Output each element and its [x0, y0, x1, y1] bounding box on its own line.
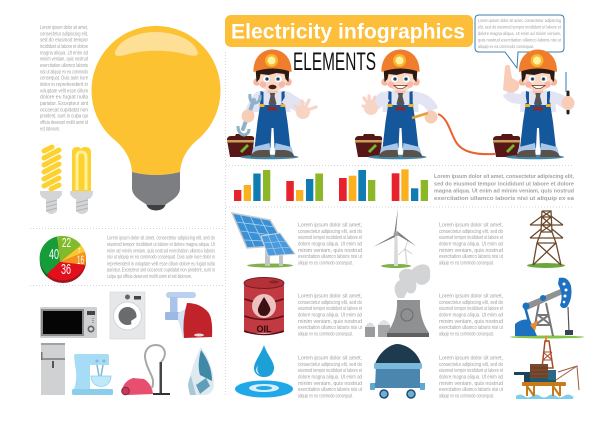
text block: water: aliquip ex ea commodo consequat.	[298, 394, 353, 400]
text block: solar: consectetur adipiscing elit, sed do	[298, 229, 362, 235]
icon: microwave	[40, 307, 97, 338]
text block: solar: Lorem ipsum dolor sit amet,	[298, 222, 362, 228]
icon: offshore oil rig	[514, 336, 579, 399]
icon: oil pumpjack	[510, 278, 584, 338]
text block: top left	[40, 25, 88, 132]
text block: top left: magna aliqua. Ut enim ad	[40, 50, 88, 56]
text block: water: minim veniam, quis nostrud	[298, 381, 362, 387]
icon: U-tube CFL bulb	[70, 147, 93, 214]
text block: wind	[439, 222, 504, 266]
text block: bar chart caption: magna aliqua. Ut enim ad minim veniam, quis nostrud	[434, 189, 574, 195]
text block: top left: dolore eu fugiat nulla	[40, 95, 88, 101]
text block: pie chart caption: eiusmod tempor incididunt ut labore et dolore magna aliqua. Ut	[107, 242, 215, 248]
text block: wind: dolore magna aliqua. Ut enim ad	[439, 242, 503, 248]
icon: vacuum cleaner	[122, 345, 170, 395]
text block: pie chart caption: culpa qui officia deserunt mollit anim id est laborum.	[107, 274, 192, 280]
text block: coal: dolore magna aliqua. Ut enim ad	[439, 374, 503, 380]
text block: top left: pariatur. Excepteur sint	[40, 101, 88, 107]
text block: coal: Lorem ipsum dolor sit amet,	[439, 356, 504, 362]
subtitle: ELEMENTS	[293, 48, 376, 76]
icon: coal cart	[370, 344, 425, 398]
dividers	[30, 52, 572, 397]
icon: nuclear plant	[365, 264, 430, 337]
text block: nuclear	[439, 294, 504, 338]
text block: wind: consectetur adipiscing elit, sed do	[439, 229, 503, 235]
icon: solar panels	[232, 213, 295, 268]
icon: power pylon	[527, 211, 565, 268]
pie chart	[40, 236, 86, 283]
text block: oil: eiusmod tempor incididunt ut labore et	[298, 306, 362, 312]
pie chart: 16	[77, 253, 84, 267]
text block: coal: aliquip ex ea commodo consequat.	[439, 394, 494, 400]
title banner	[225, 15, 473, 47]
pie chart: 40	[49, 246, 59, 263]
icon: refrigerator	[41, 343, 65, 395]
text block: nuclear: exercitation ullamco laboris nisi ut	[439, 325, 503, 331]
speech bubble: aliquip ex ea commodo consequat.	[478, 44, 534, 50]
text block: top left: consectetur adipiscing elit,	[40, 31, 88, 37]
text block: nuclear: Lorem ipsum dolor sit amet,	[439, 294, 504, 300]
text block: pie chart caption: enim ad minim veniam, quis nostrud exercitation ullamco laboris	[107, 248, 215, 254]
worker with screwdriver	[493, 50, 574, 159]
icon: wind turbines	[373, 208, 416, 268]
text block: top left: exercitation ullamco laboris	[40, 63, 88, 69]
text block: nuclear: eiusmod tempor incididunt ut labore et	[439, 306, 503, 312]
text block: solar: exercitation ullamco laboris nisi ut	[298, 254, 362, 260]
text block: top left: dolor in reprehenderit in	[40, 82, 88, 88]
text block: oil: dolore magna aliqua. Ut enim ad	[298, 312, 362, 318]
text block: coal: consectetur adipiscing elit, sed do	[439, 362, 503, 368]
text block: wind: Lorem ipsum dolor sit amet,	[439, 222, 504, 228]
text block: top left: minim veniam, quis nostrud	[40, 57, 88, 63]
text block: top left: Lorem ipsum dolor sit amet,	[40, 25, 88, 31]
text block: nuclear: dolore magna aliqua. Ut enim ad	[439, 312, 503, 318]
speech bubble	[475, 15, 564, 68]
title banner: Electricity infographics	[231, 20, 465, 44]
pie chart: 7	[78, 248, 81, 255]
text block: pie chart caption: pariatur. Excepteur sint occaecat cupidatat non proident, sunt in	[107, 268, 215, 274]
text block: oil: aliquip ex ea commodo consequat.	[298, 332, 353, 338]
text block: wind: minim veniam, quis nostrud	[439, 248, 503, 254]
text block: top left: proident, sunt in culpa qui	[40, 114, 88, 120]
text block: solar: dolore magna aliqua. Ut enim ad	[298, 242, 362, 248]
speech bubble: elit, sed do eiusmod tempor incididunt ut labore et	[478, 24, 562, 30]
text block: wind: aliquip ex ea commodo consequat.	[439, 260, 494, 266]
text block: top left: sed do eiusmod tempor	[40, 38, 88, 44]
text block: water	[298, 356, 362, 400]
text block: nuclear: consectetur adipiscing elit, sed do	[439, 300, 503, 306]
text block: bar chart caption	[434, 174, 575, 202]
text block: solar: minim veniam, quis nostrud	[298, 248, 362, 254]
text block: pie chart caption: Lorem ipsum dolor sit amet, consectetur adipiscing elit, sed do	[107, 236, 215, 242]
icon: meat grinder	[165, 292, 212, 338]
text block: oil: consectetur adipiscing elit, sed do	[298, 300, 362, 306]
text block: pie chart caption	[107, 236, 215, 280]
text block: top left: consequat. Duis aute irure	[40, 76, 88, 82]
text block: top left: occaecat cupidatat non	[40, 107, 88, 113]
text block: solar	[298, 222, 362, 266]
text block: nuclear: aliquip ex ea commodo consequat.	[439, 332, 494, 338]
text block: oil: minim veniam, quis nostrud	[298, 319, 362, 325]
icon: large light bulb	[92, 26, 220, 210]
text block: coal: eiusmod tempor incididunt ut labore et	[439, 368, 503, 374]
pie chart: 36	[61, 261, 71, 278]
text block: solar: eiusmod tempor incididunt ut labore et	[298, 235, 362, 241]
icon: iron	[188, 347, 214, 395]
text block: nuclear: minim veniam, quis nostrud	[439, 319, 503, 325]
text block: top left: officia deserunt mollit anim id	[40, 120, 88, 126]
icon: water drop and puddle	[235, 345, 293, 398]
text block: oil	[298, 294, 362, 338]
text block: wind: exercitation ullamco laboris nisi ut	[439, 254, 503, 260]
text block: water: Lorem ipsum dolor sit amet,	[298, 356, 362, 362]
text block: bar chart caption: Lorem ipsum dolor sit amet, consectetur adipiscing elit,	[434, 174, 575, 180]
icon: washing machine	[110, 292, 145, 339]
text block: oil: Lorem ipsum dolor sit amet,	[298, 294, 362, 300]
text block: top left: incididunt ut labore et dolore	[40, 44, 88, 50]
text block: water: dolore magna aliqua. Ut enim ad	[298, 374, 362, 380]
speech bubble: dolore magna aliqua. Ut enim ad minim veniam,	[478, 31, 561, 37]
text block: water: exercitation ullamco laboris nisi ut	[298, 387, 362, 393]
text block: top left: voluptate velit esse cillum	[40, 88, 88, 94]
bar chart 2	[286, 174, 323, 201]
text block: coal: exercitation ullamco laboris nisi ut	[439, 387, 503, 393]
bar chart 4	[392, 169, 428, 201]
icon: oil barrel: OIL	[256, 324, 272, 334]
text block: bar chart caption: sed do eiusmod tempor incididunt ut labore et dolore	[434, 181, 574, 187]
text block: top left: est laborum.	[40, 126, 60, 132]
text block: coal: minim veniam, quis nostrud	[439, 381, 503, 387]
icon: stand mixer	[72, 354, 113, 395]
text block: oil: exercitation ullamco laboris nisi ut	[298, 325, 362, 331]
speech bubble: Lorem ipsum dolor sit amet, consectetur adipiscing	[478, 18, 561, 24]
text block: water: eiusmod tempor incididunt ut labore et	[298, 368, 362, 374]
text block: top left: nisi ut aliquip ex ea commodo	[40, 69, 88, 75]
speech bubble: quis nostrud exercitation ullamco laboris nisi ut	[478, 37, 562, 43]
icon: oil barrel	[244, 278, 284, 334]
bar chart 1	[234, 170, 270, 201]
text block: pie chart caption: nisi ut aliquip ex ea commodo consequat. Duis aute irure dolor in	[107, 255, 215, 261]
worker with cable	[355, 50, 495, 159]
pie chart: 22	[62, 236, 71, 250]
icon: spiral CFL bulb	[40, 147, 62, 214]
text block: pie chart caption: reprehenderit in voluptate velit esse cillum dolore eu fugiat nulla	[107, 261, 215, 267]
text block: bar chart caption: exercitation ullamco laboris nisi ut aliquip ex ea	[434, 196, 574, 202]
text block: wind: eiusmod tempor incididunt ut labore et	[439, 235, 503, 241]
text block: solar: aliquip ex ea commodo consequat.	[298, 260, 353, 266]
worker with wrench	[227, 50, 316, 159]
bar chart 3	[339, 170, 375, 201]
text block: coal	[439, 356, 504, 400]
text block: water: consectetur adipiscing elit, sed do	[298, 362, 362, 368]
